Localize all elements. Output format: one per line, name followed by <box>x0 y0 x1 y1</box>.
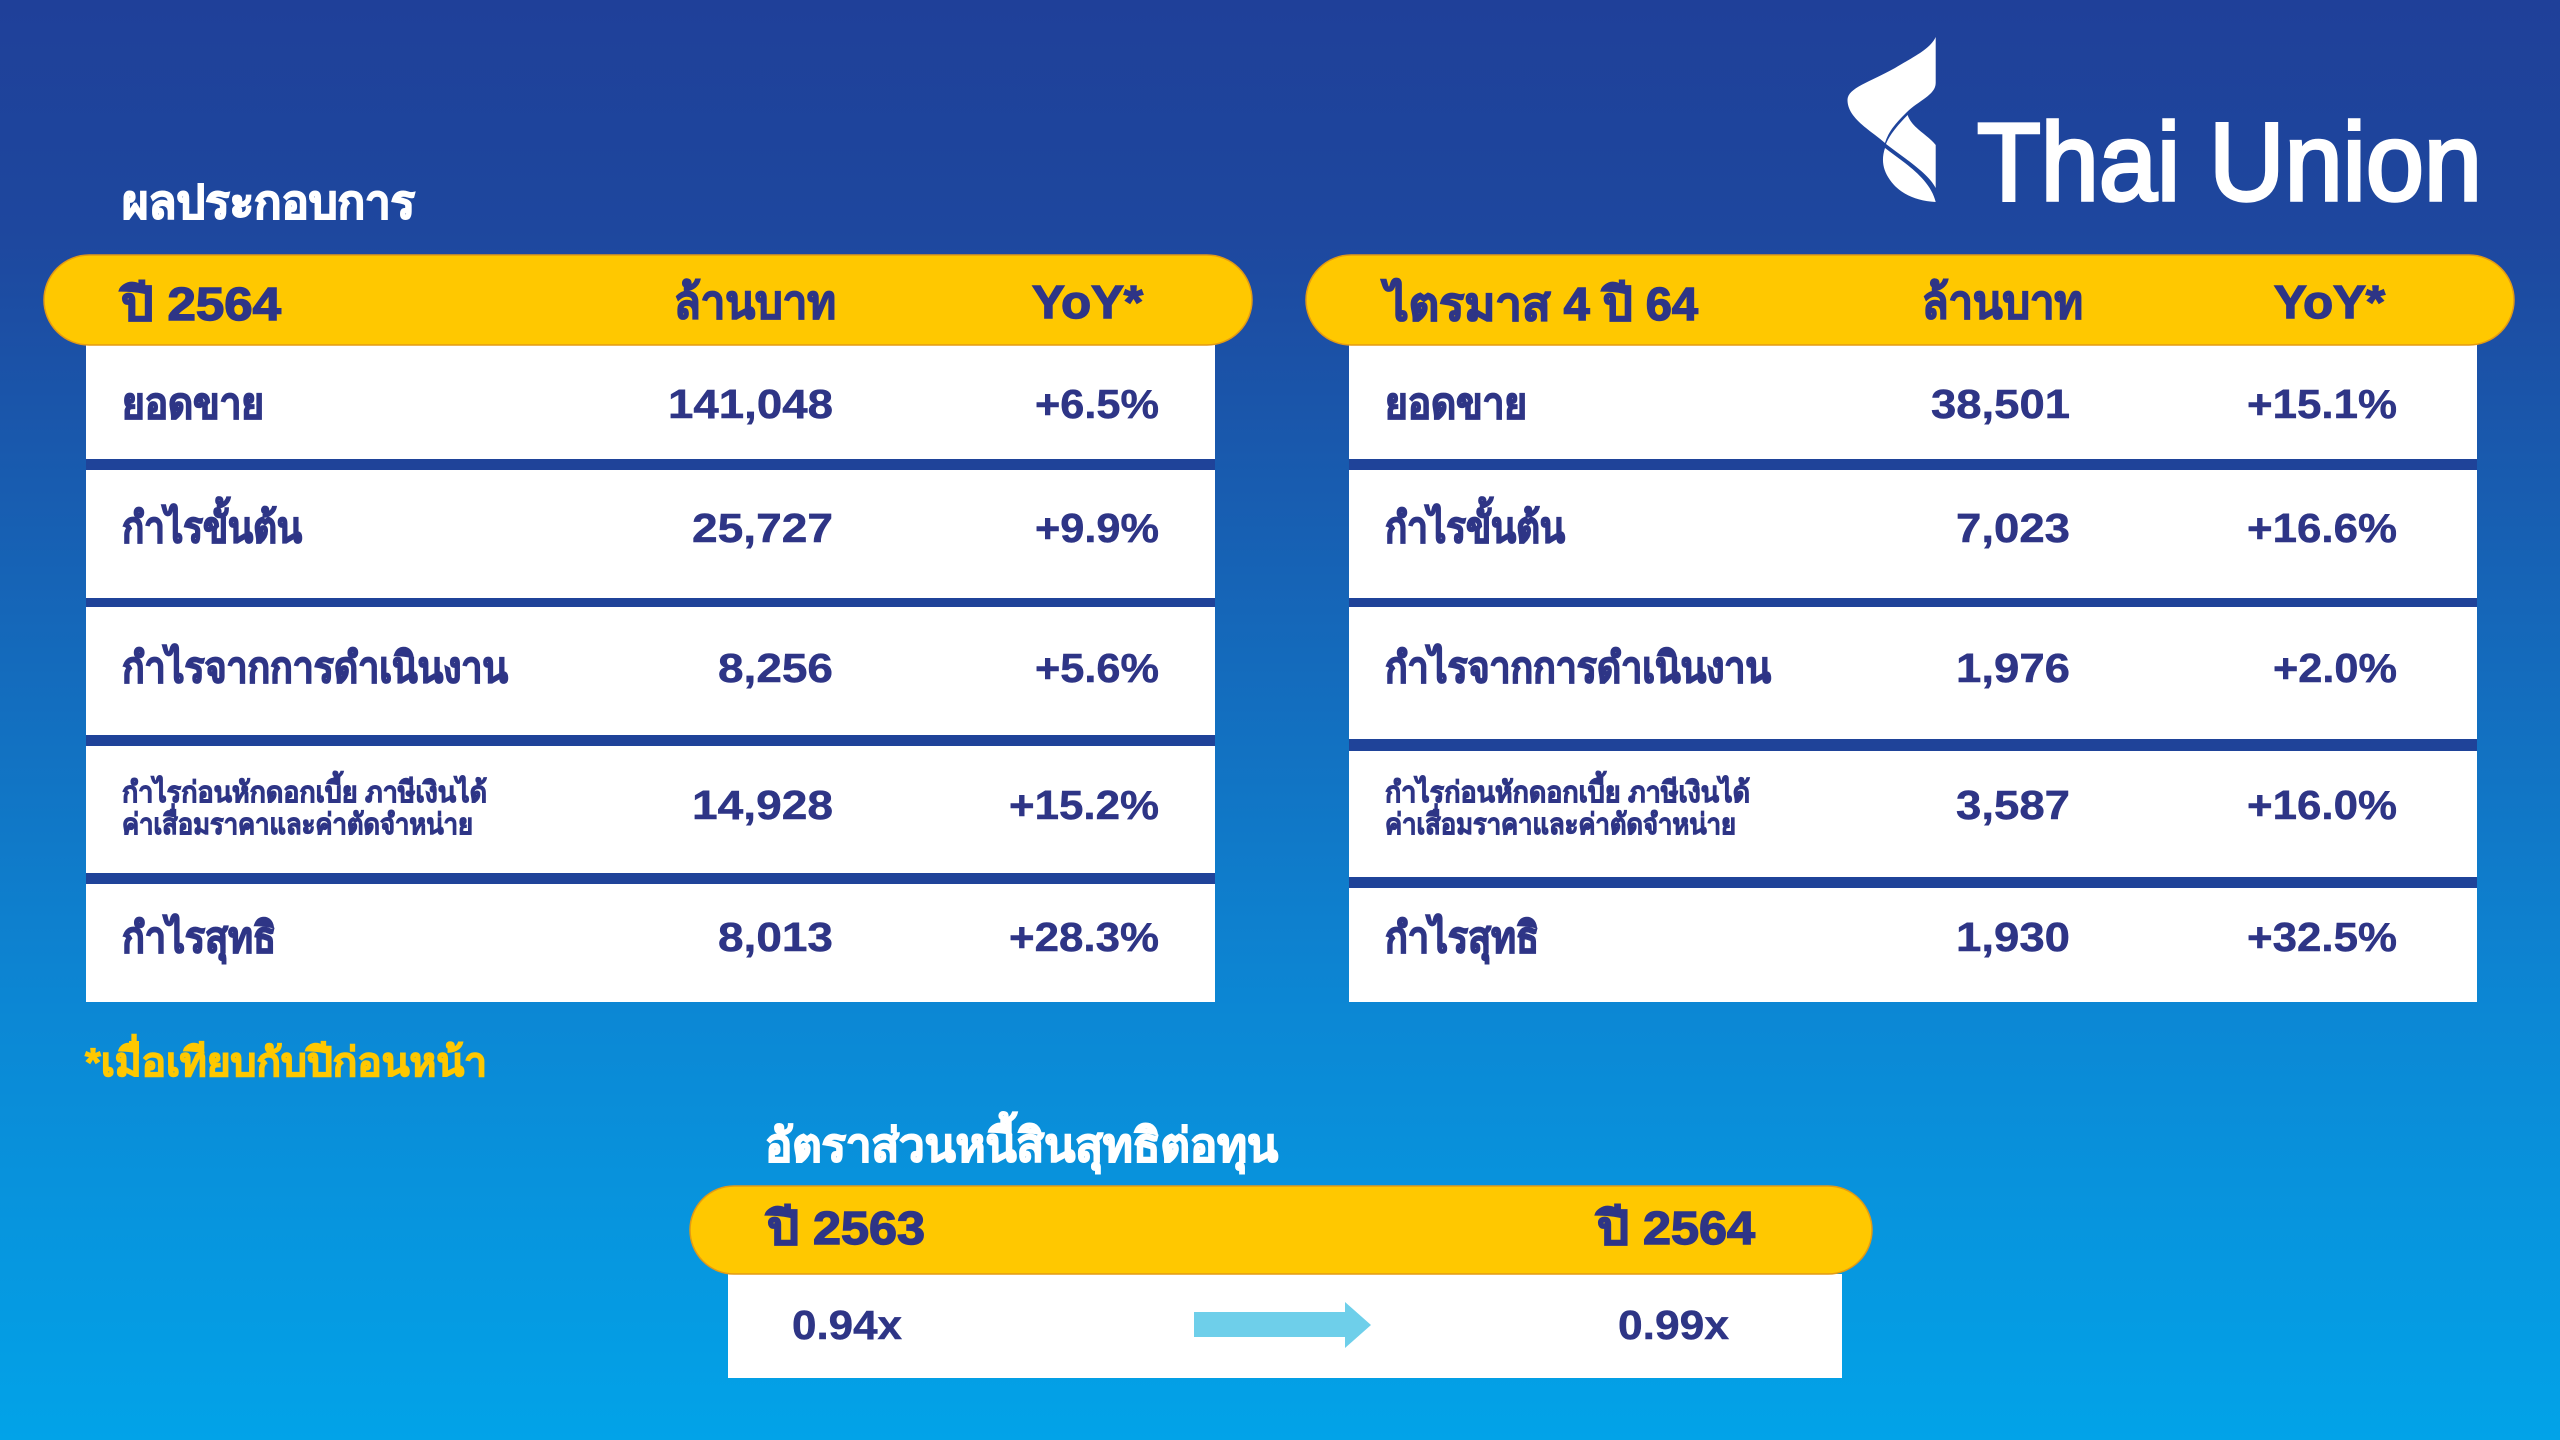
row: กำไรสุทธิ Q4: +32.5% <box>2247 914 2397 960</box>
row: EBITDA Q4: 3,587 <box>1956 782 2070 828</box>
row: EBITDA Q4: +16.0% <box>2247 782 2397 828</box>
row: กำไรสุทธิ: กำไรสุทธิ <box>122 913 276 964</box>
row: กำไรจากการดำเนินงาน Q4: +2.0% <box>2273 645 2397 691</box>
row: กำไรขั้นต้น: 25,727 <box>692 505 833 551</box>
panel: ปี 2564 table <box>44 255 1252 1002</box>
table body: ไตรมาส 4 ปี 64 <box>1349 345 2477 1002</box>
panel: ไตรมาส 4 ปี 64 table <box>1306 255 2514 1002</box>
row: ยอดขาย Q4 <box>1385 380 2397 427</box>
row: กำไรขั้นต้น Q4 <box>1385 496 2397 551</box>
row: กำไรสุทธิ: +28.3% <box>1009 914 1159 960</box>
value row background <box>728 1274 1842 1378</box>
row: ยอดขาย Q4: +15.1% <box>2247 381 2397 427</box>
row: กำไรจากการดำเนินงาน Q4: 1,976 <box>1956 645 2070 691</box>
logo: Thai Union <box>1848 37 2482 224</box>
row: กำไรสุทธิ Q4: 1,930 <box>1956 914 2070 960</box>
row: กำไรขั้นต้น <box>122 496 1159 551</box>
icon: logo mark <box>1848 37 1936 202</box>
row: กำไรขั้นต้น Q4: กำไรขั้นต้น <box>1385 496 1565 551</box>
row: ยอดขาย Q4: 38,501 <box>1931 381 2070 427</box>
row: ยอดขาย: +6.5% <box>1035 381 1159 427</box>
header bar: ไตรมาส 4 ปี 64 <box>1306 255 2514 345</box>
row: EBITDA Q4: ค่าเสื่อมราคาและค่าตัดจำหน่าย <box>1385 803 1736 841</box>
row: กำไรจากการดำเนินงาน Q4 <box>1385 643 2397 691</box>
row: กำไรสุทธิ <box>122 913 1159 964</box>
value: 0.99x: 0.99x <box>1618 1302 1729 1348</box>
header bar: ไตรมาส 4 ปี 64: YoY* <box>2274 276 2385 328</box>
row: ยอดขาย: ยอดขาย <box>122 380 264 427</box>
row: กำไรขั้นต้น: +9.9% <box>1035 505 1159 551</box>
row: กำไรขั้นต้น Q4: 7,023 <box>1956 505 2070 551</box>
arrow <box>1194 1302 1371 1348</box>
header bar: ปี 2563 ปี 2564: ปี 2563 <box>764 1202 925 1254</box>
panel: net debt to equity <box>690 1186 1872 1378</box>
row: EBITDA Q4: กำไรก่อนหักดอกเบี้ย ภาษีเงินได้ <box>1385 770 1750 809</box>
row: EBITDA: 14,928 <box>692 782 833 828</box>
header bar: ปี 2564: YoY* <box>1032 276 1143 328</box>
row: ยอดขาย <box>122 380 1159 427</box>
row: กำไรจากการดำเนินงาน <box>122 643 1159 691</box>
row: กำไรจากการดำเนินงาน: กำไรจากการดำเนินงาน <box>122 643 508 691</box>
row: EBITDA <box>122 770 1159 841</box>
row: กำไรสุทธิ: 8,013 <box>718 914 833 960</box>
logo wordmark: Thai Union <box>1977 101 2482 224</box>
row: กำไรสุทธิ Q4: กำไรสุทธิ <box>1385 913 1539 964</box>
row: กำไรจากการดำเนินงาน Q4: กำไรจากการดำเนินงาน <box>1385 643 1771 691</box>
heading: ผลประกอบการ: ผลประกอบการ <box>122 176 415 228</box>
header bar: ปี 2563 ปี 2564: ปี 2564 <box>1594 1202 1755 1254</box>
header bar: ปี 2564: ปี 2564 <box>118 278 281 330</box>
footnote: *เมื่อเทียบกับปีก่อนหน้า <box>85 1034 487 1085</box>
row: ยอดขาย Q4: ยอดขาย <box>1385 380 1527 427</box>
row: กำไรขั้นต้น Q4: +16.6% <box>2247 505 2397 551</box>
header bar: ไตรมาส 4 ปี 64: ไตรมาส 4 ปี 64 <box>1380 278 1698 330</box>
row: กำไรขั้นต้น: กำไรขั้นต้น <box>122 496 302 551</box>
row: กำไรจากการดำเนินงาน: +5.6% <box>1035 645 1159 691</box>
header bar: ปี 2563 ปี 2564 <box>690 1186 1872 1274</box>
table body: ปี 2564 <box>86 345 1215 1002</box>
heading: อัตราส่วนหนี้สินสุทธิต่อทุน: อัตราส่วนหนี้สินสุทธิต่อทุน <box>765 1111 1279 1174</box>
header bar: ปี 2564: ล้านบาท <box>674 276 836 328</box>
row: ยอดขาย: 141,048 <box>668 381 833 427</box>
row: EBITDA: ค่าเสื่อมราคาและค่าตัดจำหน่าย <box>122 803 473 841</box>
row: กำไรสุทธิ Q4 <box>1385 913 2397 964</box>
row: EBITDA: +15.2% <box>1009 782 1159 828</box>
header bar: ไตรมาส 4 ปี 64: ล้านบาท <box>1922 276 2083 328</box>
row: EBITDA: กำไรก่อนหักดอกเบี้ย ภาษีเงินได้ <box>122 770 487 809</box>
header bar: ปี 2564 <box>44 255 1252 345</box>
row: กำไรจากการดำเนินงาน: 8,256 <box>718 645 833 691</box>
value: 0.94x: 0.94x <box>792 1302 902 1348</box>
row: EBITDA Q4 <box>1385 770 2397 841</box>
